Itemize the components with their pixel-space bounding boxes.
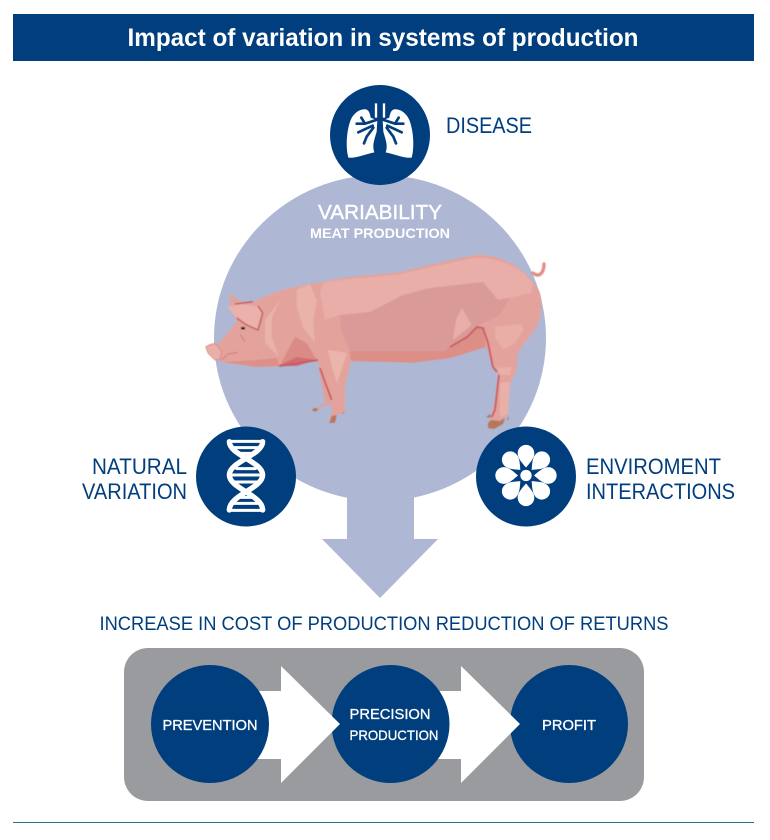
label: natural variation (82, 454, 187, 504)
label: enviroment interactions: INTERACTIONS (586, 479, 735, 504)
right lung (383, 109, 413, 158)
footer rule (13, 822, 754, 823)
pig hooves (312, 408, 509, 429)
pig jaw band (223, 358, 280, 367)
down arrow (322, 490, 438, 598)
circle: prevention: PREVENTION (162, 718, 258, 734)
circle: profit: PROFIT (542, 718, 596, 734)
pig chest (280, 337, 317, 365)
pig rear patch (495, 324, 523, 350)
pig body outline (206, 255, 541, 423)
pig far leg (312, 362, 340, 410)
label: natural variation: VARIATION (82, 479, 187, 504)
icon: dna (196, 426, 296, 526)
pig flank shading (340, 282, 510, 351)
title banner (13, 14, 754, 61)
variability heading: VARIABILITY (318, 202, 442, 224)
pig face lines (222, 334, 245, 360)
pig rear leg highlight (497, 367, 512, 417)
pig ear outline (235, 302, 263, 330)
trachea (376, 103, 384, 118)
panel: process flow (124, 648, 644, 801)
arrow: precision to profit (390, 666, 520, 783)
pig red creases (279, 327, 499, 417)
pig illustration (206, 255, 544, 429)
circle: precision production (332, 665, 450, 783)
pig tail (533, 264, 544, 275)
title banner: Impact of variation in systems of production (128, 24, 638, 52)
pig upper back highlight (320, 258, 533, 320)
pig near leg highlight (328, 350, 347, 383)
label: natural variation: NATURAL (92, 454, 187, 479)
label: enviroment interactions (586, 454, 735, 504)
variability heading: MEAT PRODUCTION (310, 225, 450, 241)
icon: lungs (330, 85, 430, 185)
arrow: prevention to precision (210, 666, 340, 783)
left lung (347, 109, 377, 158)
label: disease: DISEASE (446, 113, 532, 138)
pig near ear (227, 304, 263, 330)
label: enviroment interactions: ENVIROMENT (586, 454, 721, 479)
pig belly band (350, 327, 486, 363)
circle: prevention (151, 665, 269, 783)
circle: precision production: PRODUCTION (350, 727, 438, 743)
pig chest shadow (278, 357, 317, 366)
circle: profit (510, 665, 628, 783)
pig flank highlight (453, 308, 472, 340)
subheading: cost and returns: INCREASE IN COST OF PRODUCTION REDUCTION OF RETURNS (100, 614, 668, 635)
variability circle (214, 175, 546, 501)
icon: flower (476, 426, 576, 526)
pig snout (206, 343, 222, 360)
pig eye (241, 327, 245, 330)
variability heading (310, 202, 450, 241)
circle: precision production: PRECISION (350, 707, 430, 723)
pig neck highlights (265, 284, 317, 357)
